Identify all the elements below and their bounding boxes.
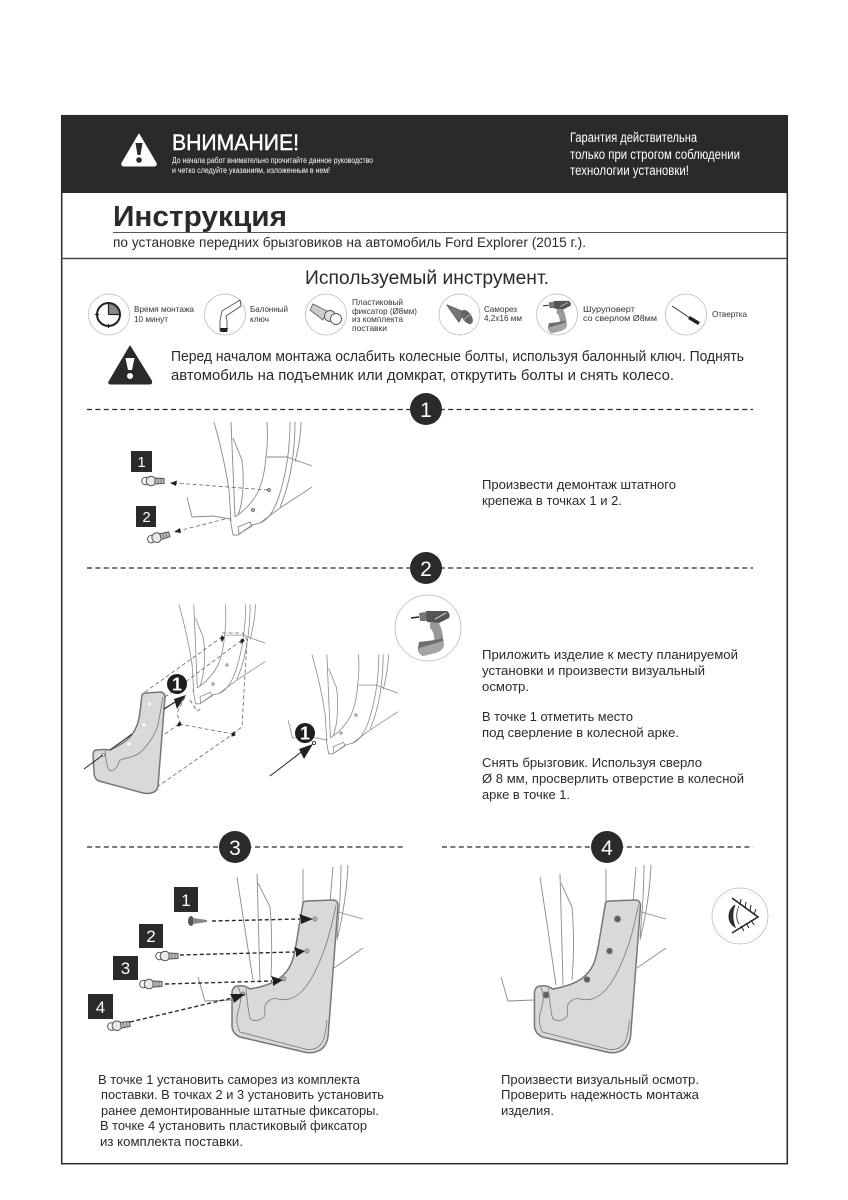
label 2 xyxy=(139,924,163,948)
step 2 text: под сверление в колесной арке. xyxy=(482,725,679,740)
step 2 left diagram xyxy=(84,604,265,794)
step 1 text: Произвести демонтаж штатного xyxy=(482,477,676,492)
step 2 text: Ø 8 мм, просверлить отверстие в колесной xyxy=(482,771,744,786)
label 1: 1 xyxy=(137,454,146,471)
step 2 divider: 2 xyxy=(420,558,432,581)
warranty note: только при строгом соблюдении xyxy=(570,147,740,162)
tool: screwdriver xyxy=(666,294,747,335)
tool: plastic clip: поставки xyxy=(352,323,387,333)
label 3 xyxy=(113,956,138,980)
step 1 divider xyxy=(87,393,753,425)
step 1 text: крепежа в точках 1 и 2. xyxy=(482,493,622,508)
page frame xyxy=(62,116,787,1164)
header banner xyxy=(61,115,788,193)
tools heading: Используемый инструмент. xyxy=(305,268,549,289)
step 4 divider: 4 xyxy=(601,837,613,860)
arrow lower xyxy=(84,734,132,769)
step 3 divider xyxy=(87,831,406,863)
tool: drill: со сверлом Ø8мм xyxy=(583,313,657,323)
step 2 text: арке в точке 1. xyxy=(482,787,570,802)
step 2 text: Приложить изделие к месту планируемой xyxy=(482,647,738,662)
arrow xyxy=(270,741,316,776)
label 1 xyxy=(131,451,152,472)
step 1 divider: 1 xyxy=(420,399,432,422)
step 4 text: Произвести визуальный осмотр. xyxy=(501,1072,699,1087)
step 2 text: осмотр. xyxy=(482,679,529,694)
fastener 1 xyxy=(142,476,164,486)
step 3 divider: 3 xyxy=(229,837,241,860)
label 2: 2 xyxy=(146,927,156,946)
warning notice xyxy=(109,346,744,384)
fastener 2 xyxy=(146,530,170,545)
fastener 4 xyxy=(107,1019,130,1032)
icon: warning triangle white xyxy=(122,134,156,166)
title: Инструкция xyxy=(113,201,287,233)
step 3 text: из комплекта поставки. xyxy=(100,1134,243,1149)
icon: drill xyxy=(395,595,461,661)
tool: time xyxy=(88,294,194,335)
step 3 text: В точке 1 установить саморез из комплекта xyxy=(98,1072,361,1087)
step 2 text xyxy=(482,647,744,802)
step 2 right diagram xyxy=(270,654,398,776)
marker 1: 1 xyxy=(172,674,182,694)
step 1 text xyxy=(482,477,676,508)
tool: screw: 4,2х16 мм xyxy=(484,313,522,323)
label 4 xyxy=(88,994,113,1019)
tool: plastic clip: из комплекта xyxy=(352,314,403,324)
step 4 divider xyxy=(442,831,753,863)
step 3 diagram xyxy=(88,865,363,1053)
mudflap xyxy=(232,900,338,1053)
marker 1: 1 xyxy=(300,724,310,744)
step 4 text xyxy=(501,1072,700,1118)
step 1 diagram xyxy=(131,422,312,545)
subtitle: по установке передних брызговиков на автомобиль Ford Explorer (2015 г.). xyxy=(113,235,586,250)
tool: plastic clip: фиксатор (Ø8мм) xyxy=(352,306,417,316)
tool: plastic clip: Пластиковый xyxy=(352,297,403,307)
step 4 text: изделия. xyxy=(501,1103,554,1118)
warning notice: автомобиль на подъемник или домкрат, открутить болты и снять колесо. xyxy=(171,368,674,384)
step 3 text: ранее демонтированные штатные фиксаторы. xyxy=(101,1103,379,1118)
tool: drill xyxy=(536,294,657,335)
step 3 text: В точке 4 установить пластиковый фиксатор xyxy=(100,1118,367,1133)
step 2 text: установки и произвести визуальный xyxy=(482,663,705,678)
step 4 text: Проверить надежность монтажа xyxy=(501,1087,700,1102)
arrows xyxy=(130,914,313,1022)
label 3: 3 xyxy=(121,959,130,978)
step 4 diagram xyxy=(501,865,666,1053)
tool: screw: Саморез xyxy=(484,304,517,314)
tool: screw xyxy=(439,294,522,335)
warning notice: Перед началом монтажа ослабить колесные болты, используя балонный ключ. Поднять xyxy=(171,349,744,365)
step 2 text: В точке 1 отметить место xyxy=(482,709,633,724)
tool: time: 10 минут xyxy=(134,314,168,324)
tool: wheel wrench: ключ xyxy=(250,314,269,324)
banner note: До начала работ внимательно прочитайте данное руководство xyxy=(172,156,373,165)
banner note xyxy=(172,156,373,175)
tools row xyxy=(88,294,747,335)
icon: eye xyxy=(712,888,768,944)
mudflap xyxy=(93,692,165,794)
label 2: 2 xyxy=(142,509,151,526)
tool: time: Время монтажа xyxy=(134,304,194,314)
tool: screwdriver: Отвертка xyxy=(712,309,747,319)
warranty note: технологии установки! xyxy=(570,163,689,178)
marker 1 xyxy=(167,674,187,694)
step 3 text xyxy=(98,1072,384,1149)
tool: wheel wrench xyxy=(204,294,288,335)
arrow to point 1 xyxy=(164,695,186,709)
warranty note: Гарантия действительна xyxy=(570,130,697,145)
icon: screw xyxy=(188,916,207,926)
banner heading: ВНИМАНИЕ! xyxy=(172,130,299,155)
step 3 text: поставки. В точках 2 и 3 установить установить xyxy=(101,1087,384,1102)
tool: wheel wrench: Балонный xyxy=(250,304,288,314)
label 1 xyxy=(174,887,198,912)
step 2 text: Снять брызговик. Используя сверло xyxy=(482,755,702,770)
label 4: 4 xyxy=(96,998,105,1017)
warranty note xyxy=(570,130,740,178)
label 1: 1 xyxy=(181,891,191,910)
fastener 2 xyxy=(156,951,178,961)
mudflap xyxy=(534,900,640,1053)
banner note: и четко следуйте указаниям, изложенным в нем! xyxy=(172,166,330,175)
icon: warning triangle xyxy=(109,346,152,384)
tool: drill: Шуруповерт xyxy=(583,304,635,314)
tool: plastic clip xyxy=(306,294,417,335)
label 2 xyxy=(136,506,156,527)
step 2 divider xyxy=(87,552,753,584)
fastener 3 xyxy=(140,979,162,989)
installed fasteners xyxy=(543,916,621,998)
